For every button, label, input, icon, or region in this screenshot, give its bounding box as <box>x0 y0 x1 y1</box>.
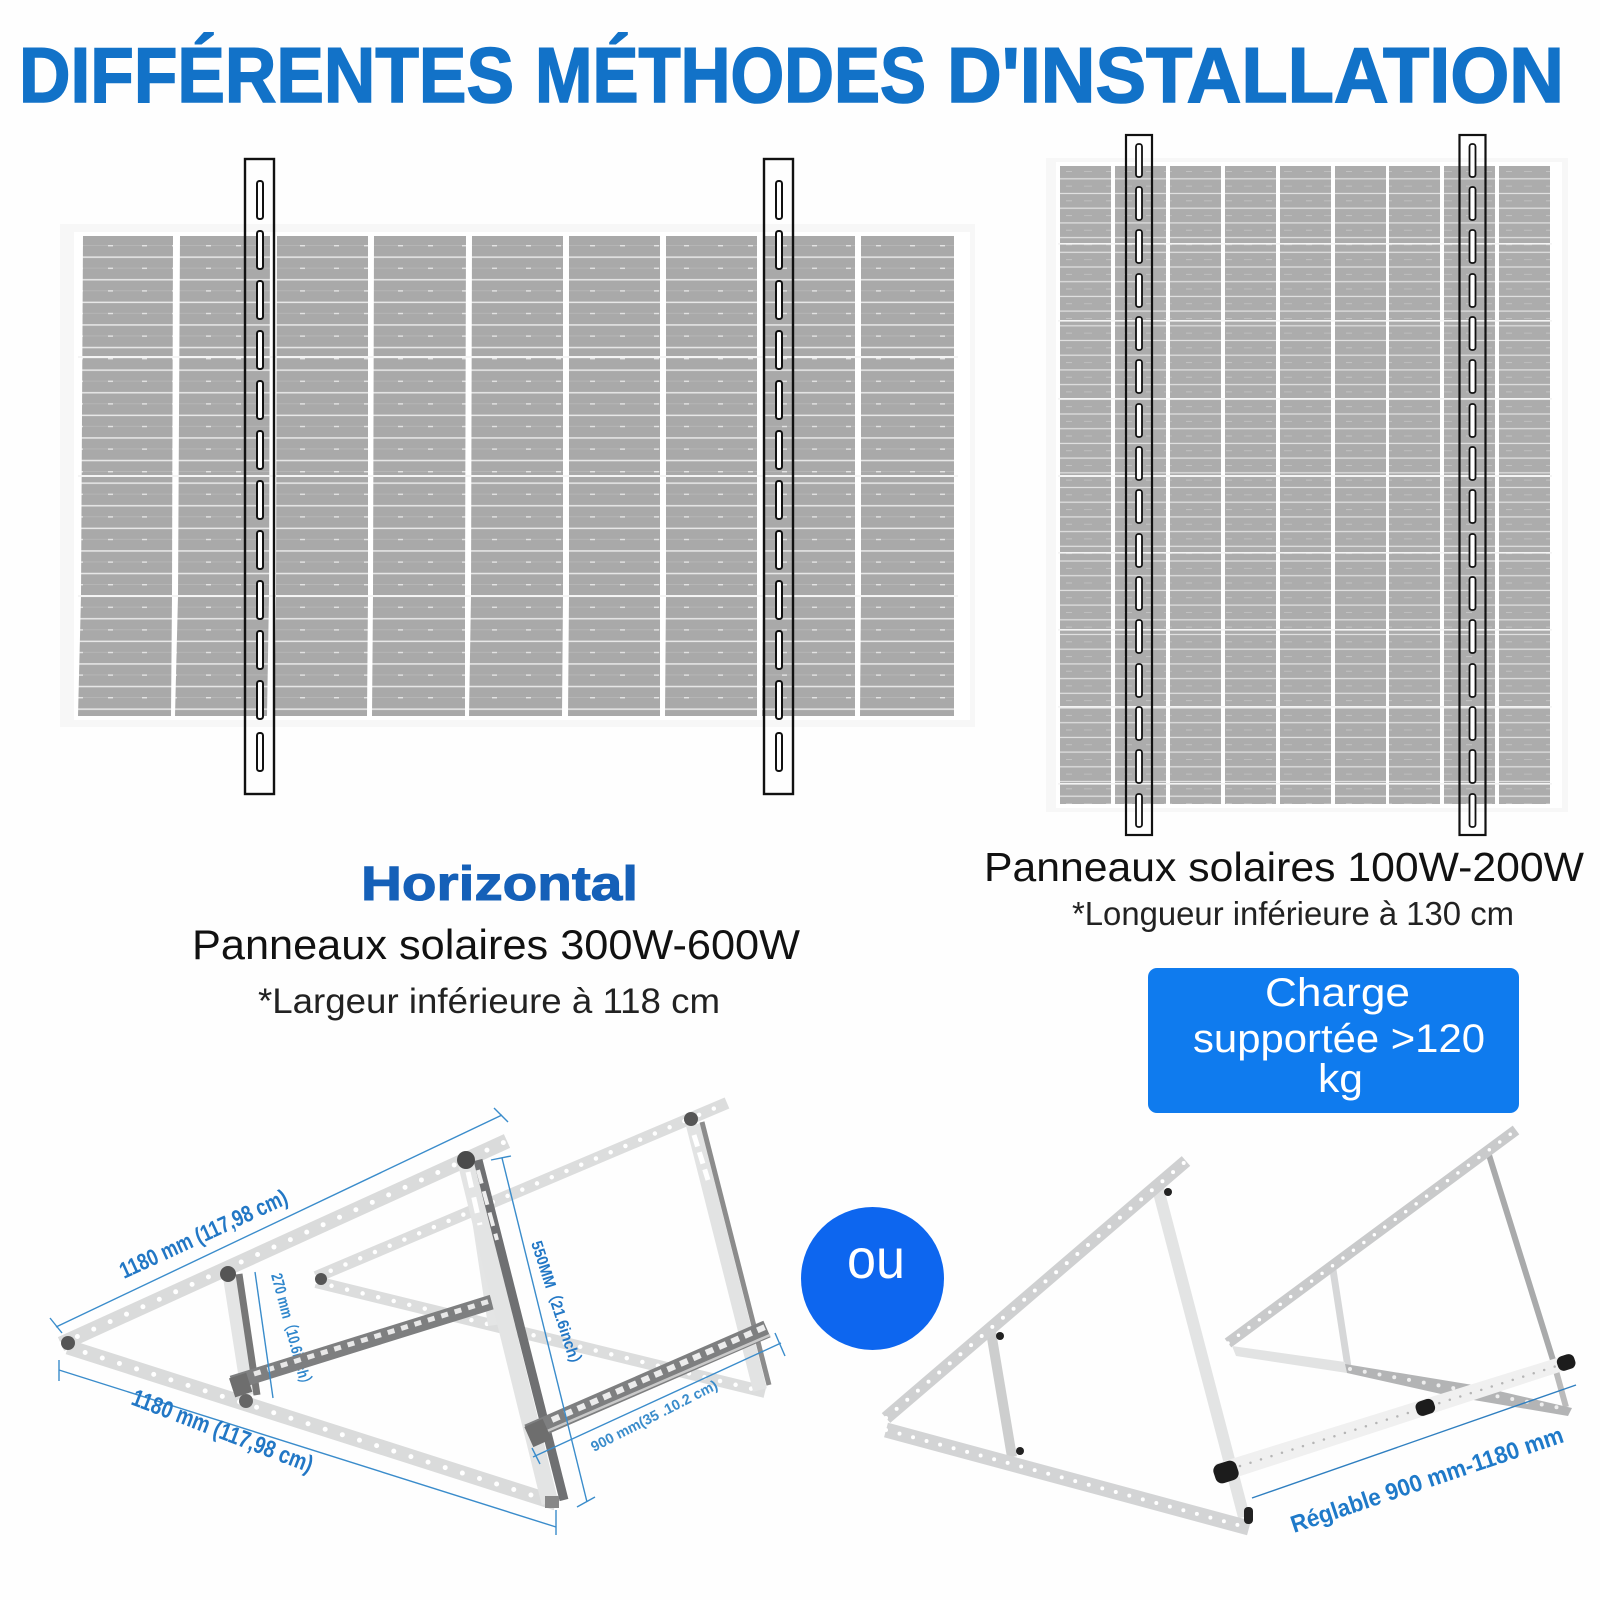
heading: Horizontal: Horizontal <box>361 858 638 911</box>
front long upright <box>61 1151 564 1508</box>
front short upright <box>220 1266 257 1408</box>
short crossbar <box>229 1301 492 1397</box>
panel: horizontal solar panel <box>60 224 975 727</box>
dimension text: 900 mm: 900 mm(35 .10.2 cm) <box>589 1378 721 1456</box>
title: D'INSTALLATION <box>947 31 1564 119</box>
callout: load capacity <box>1148 968 1519 1113</box>
dimension text: adjustable range: Réglable 900 mm-1180 mm <box>1287 1422 1567 1539</box>
dimension text: top rail: 1180 mm (117,98 cm) <box>115 1184 291 1284</box>
frame A <box>886 1161 1253 1528</box>
bracket rail: vertical panel right <box>1460 135 1486 835</box>
front bottom rail <box>68 1347 556 1503</box>
back frame <box>315 1103 769 1392</box>
adjustment range line <box>1252 1385 1576 1498</box>
frame B <box>1228 1130 1572 1416</box>
title <box>19 31 1564 119</box>
dimension lines <box>50 1108 785 1535</box>
note: horizontal panel width: *Largeur inférieure à 118 cm <box>258 982 720 1021</box>
dimension text: 550 mm: 550MM（21.6inch） <box>527 1239 586 1374</box>
long crossbar <box>524 1327 770 1447</box>
front top rail <box>61 1141 507 1344</box>
panel: vertical solar panel <box>1046 158 1568 812</box>
callout: load capacity: kg <box>1318 1057 1363 1101</box>
solar cell columns, vertical panel <box>1060 166 1550 804</box>
title: MÉTHODES <box>535 31 926 119</box>
diagram: fixed mount with dimensions <box>50 1103 785 1535</box>
badge: ou <box>801 1207 944 1350</box>
badge: ou: ou <box>847 1227 905 1290</box>
callout: load capacity: supportée >120 <box>1193 1017 1485 1061</box>
heading: horizontal panel wattage: Panneaux solaires 300W-600W <box>192 921 800 968</box>
note: vertical panel length: *Longueur inférieure à 130 cm <box>1072 895 1514 932</box>
dimension text: bottom rail: 1180 mm (117,98 cm) <box>128 1384 317 1478</box>
heading: vertical panel wattage: Panneaux solaires 100W-200W <box>984 844 1584 890</box>
adjustable crossbar with knobs <box>1211 1353 1577 1485</box>
diagram: adjustable mount <box>886 1130 1577 1539</box>
bracket rail: vertical panel left <box>1126 135 1152 835</box>
dimension text 270 mm: 270 mm（10.6inch） <box>267 1271 316 1392</box>
bracket rail: horizontal panel left <box>245 159 274 794</box>
title: DIFFÉRENTES <box>19 31 514 119</box>
callout: load capacity: Charge <box>1265 971 1410 1015</box>
solar cell columns, horizontal panel <box>78 236 954 716</box>
bracket rail: horizontal panel right <box>764 159 793 794</box>
